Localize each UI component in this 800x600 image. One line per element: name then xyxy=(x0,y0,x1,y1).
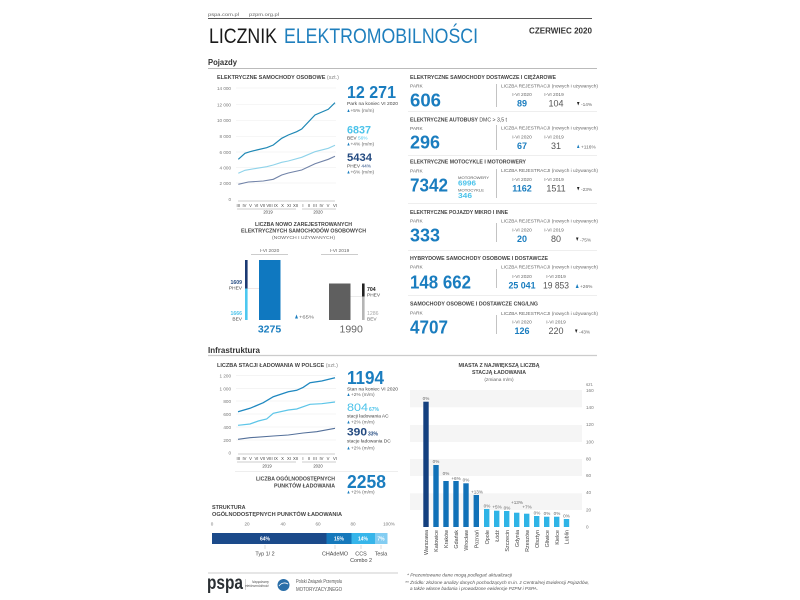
park value: 7342 xyxy=(410,176,448,196)
segment labels xyxy=(255,545,387,564)
city labels: Kraków xyxy=(444,530,450,548)
y axis: 140 xyxy=(586,405,594,410)
city labels: Rzeszów xyxy=(525,530,531,552)
registrations: LICZBA REJESTRACJI (nowych i używanych) xyxy=(501,264,598,270)
panel: CNG/LNG xyxy=(410,302,598,338)
change indicator xyxy=(295,314,315,320)
line chart xyxy=(220,374,337,468)
line chart: IX xyxy=(274,203,278,208)
line chart: VI xyxy=(255,203,258,208)
bars: I-VI 2019: 1286 xyxy=(367,311,379,317)
title xyxy=(209,24,478,48)
line chart: 12 000 xyxy=(217,102,231,108)
bars: I-VI 2020: 1609 xyxy=(230,280,242,286)
panel: CNG/LNG: PARK xyxy=(410,310,424,316)
card title: ELEKTRYCZNE AUTOBUSY DMC > 3,5 t xyxy=(410,118,507,124)
registrations: 80 xyxy=(551,234,561,244)
logo: PSPA: elektromobilność xyxy=(245,584,269,588)
line chart: IV xyxy=(243,456,247,461)
city labels: Gdańsk xyxy=(454,530,460,549)
stat: PHEV: PHEV 44% xyxy=(347,164,372,170)
bars: I-VI 2020: I-VI 2020 xyxy=(260,248,280,254)
card title: ELEKTRYCZNE POJAZDY MIKRO I INNE xyxy=(410,210,508,216)
stat: all stations: Stan na koniec VI 2020 xyxy=(347,386,398,392)
line chart: 8 000 xyxy=(220,134,231,139)
chart heading: (zmiana m/m) xyxy=(484,377,514,383)
registrations: I-VI 2020 xyxy=(512,320,532,326)
line chart: V xyxy=(327,203,330,208)
segment labels: Typ 1/ 2 xyxy=(255,552,275,558)
line chart: VI xyxy=(333,456,337,461)
panel: micro vehicles xyxy=(410,210,598,246)
line chart: 2020 xyxy=(313,464,323,468)
header links xyxy=(208,12,279,18)
panel: buses: PARK xyxy=(410,126,424,132)
line chart: XI xyxy=(287,203,291,208)
line chart: I xyxy=(302,456,304,461)
registrations: I-VI 2020 xyxy=(512,177,532,183)
bars: I-VI 2019: I-VI 2019 xyxy=(330,248,350,254)
stat: BEV: BEV 56% xyxy=(347,136,368,142)
panel: newly registered cars xyxy=(229,222,381,336)
line chart: 200 xyxy=(223,438,231,443)
stat: total park: Park na koniec VI 2020 xyxy=(347,101,398,107)
panel: micro vehicles: PARK xyxy=(410,218,424,224)
percent labels: 0% xyxy=(463,478,469,482)
heading: STRUKTURA xyxy=(212,505,246,511)
breakdown xyxy=(458,175,489,200)
percent labels: 0% xyxy=(534,510,540,516)
city labels: Olsztyn xyxy=(535,530,541,548)
line chart: XII xyxy=(293,203,298,208)
panel: public charging points xyxy=(256,472,386,496)
bars: I-VI 2019: 1990 xyxy=(340,324,363,336)
footnotes: * Prezentowane dane mogą podlegać aktualizacji xyxy=(407,572,513,578)
city labels: Łódź xyxy=(495,530,501,542)
line chart: VI xyxy=(333,203,337,208)
stacked bar: 15% xyxy=(334,536,345,542)
line chart: 0 xyxy=(228,197,231,202)
city labels: Poznań xyxy=(474,530,480,548)
line chart: IV xyxy=(320,203,324,208)
registrations: LICZBA REJESTRACJI (nowych i używanych) xyxy=(501,168,598,174)
registrations: 20 xyxy=(517,234,527,244)
line chart: 400 xyxy=(223,425,231,430)
registrations: I-VI 2019 xyxy=(546,320,566,326)
line chart: 2019 xyxy=(262,464,272,468)
line chart: 600 xyxy=(223,412,231,417)
panel heading: (NOWYCH I UŻYWANYCH) xyxy=(272,234,335,241)
line chart: V xyxy=(327,456,330,461)
stat: AC stations: stacji ładowania AC xyxy=(347,414,389,420)
city labels: Kielce xyxy=(555,530,561,545)
breakdown: MOTOCYKLE xyxy=(458,188,484,192)
registrations: I-VI 2019 xyxy=(544,134,564,140)
park value: 296 xyxy=(410,132,440,152)
registrations: 89 xyxy=(517,98,527,108)
city labels: Lublin xyxy=(564,530,570,544)
stat: PHEV: 5434 xyxy=(347,152,373,164)
stat: all stations: +2% (m/m) xyxy=(351,392,375,398)
panel: motorcycles: PARK xyxy=(410,168,424,174)
panel: public charging points: 2258 xyxy=(347,472,386,492)
stat: AC stations: 67% xyxy=(369,407,380,413)
heading: Pojazdy: Pojazdy xyxy=(208,58,238,67)
card title: ELEKTRYCZNE SAMOCHODY DOSTAWCZE I CIĘŻAROWE xyxy=(410,74,556,81)
chart title: ELEKTRYCZNE SAMOCHODY OSOBOWE (szt.) xyxy=(217,75,339,81)
logo: PZPM: MOTORYZACYJNEGO xyxy=(296,587,342,593)
percent labels: 0% xyxy=(504,506,510,510)
heading: OGÓLNODOSTĘPNYCH PUNKTÓW ŁADOWANIA xyxy=(212,510,342,518)
segment labels: CCS xyxy=(355,552,367,558)
bars xyxy=(423,402,569,527)
percent labels: +6% xyxy=(451,476,461,481)
stat: all stations: 1194 xyxy=(347,368,384,388)
park value: 333 xyxy=(410,226,440,246)
bars: I-VI 2019: BEV xyxy=(367,316,377,322)
panel: cities bar chart xyxy=(410,363,594,555)
registrations: 25 041 xyxy=(508,280,536,290)
y axis: 20 xyxy=(586,508,592,512)
line chart: 0 xyxy=(228,450,231,456)
stat: DC stations xyxy=(347,426,391,452)
line chart: 4 000 xyxy=(220,166,231,170)
breakdown: 6996 xyxy=(458,180,476,188)
panel heading xyxy=(241,222,366,241)
change indicator: +65% xyxy=(299,314,315,320)
y axis: 0 xyxy=(586,524,589,530)
segment labels: Combo 2 xyxy=(350,558,372,564)
stacked bar: 64% xyxy=(260,536,271,542)
line chart: V xyxy=(249,203,252,208)
percent labels: 0% xyxy=(563,514,570,518)
date: CZERWIEC 2020 xyxy=(529,26,593,36)
segment labels: CHAdeMO xyxy=(322,552,348,558)
percent labels: 0% xyxy=(554,511,560,516)
stacked bar axis: 40 xyxy=(280,522,286,526)
line chart: II xyxy=(308,456,310,461)
line chart xyxy=(217,86,337,214)
stat: total park: 12 271 xyxy=(347,82,396,102)
stat: DC stations: 33% xyxy=(368,432,379,438)
registrations: 1511 xyxy=(546,184,566,194)
bars: I-VI 2020: 1666 xyxy=(230,311,242,317)
chart heading xyxy=(458,363,540,383)
card title: SAMOCHODY OSOBOWE I DOSTAWCZE CNG/LNG xyxy=(410,302,538,308)
line chart: VI xyxy=(255,456,258,461)
stat: total park xyxy=(347,82,398,114)
percent labels: 0% xyxy=(443,471,449,476)
stacked bar axis: 80 xyxy=(350,522,356,526)
line chart: 2020 xyxy=(313,210,323,214)
y axis: 40 xyxy=(586,490,592,495)
city labels: Szczecin xyxy=(505,530,511,552)
breakdown: 346 xyxy=(458,193,472,200)
registrations: -75% xyxy=(580,238,592,244)
stat: total park: +5% (m/m) xyxy=(350,108,374,114)
panel heading: ELEKTRYCZNYCH SAMOCHODÓW OSOBOWYCH xyxy=(241,226,366,234)
title: LICZNIK xyxy=(209,25,277,48)
registrations: +116% xyxy=(581,144,596,150)
registrations: I-VI 2019 xyxy=(544,177,564,183)
bars: I-VI 2019: PHEV xyxy=(367,292,381,298)
registrations: -14% xyxy=(581,102,593,108)
registrations: 220 xyxy=(548,326,564,336)
line chart: I xyxy=(302,203,304,208)
panel: commercial vehicles xyxy=(410,74,598,110)
bars: I-VI 2020 xyxy=(229,248,288,336)
line chart: X xyxy=(281,203,284,208)
line chart: 1 000 xyxy=(220,386,231,392)
logo: PZPM xyxy=(278,579,342,593)
registrations xyxy=(501,168,598,194)
stat: PHEV: +6% (m/m) xyxy=(350,170,374,176)
registrations: I-VI 2019 xyxy=(544,92,564,98)
header links: pspa.com.pl xyxy=(208,12,239,18)
registrations xyxy=(501,218,598,244)
registrations: 126 xyxy=(514,326,530,336)
stat: BEV: 6837 xyxy=(347,124,371,136)
city labels: Gdynia xyxy=(515,530,521,547)
stacked bar axis: 0 xyxy=(211,522,214,526)
park value: 148 662 xyxy=(410,272,471,292)
percent labels: +13% xyxy=(511,500,523,505)
city labels: Gliwice xyxy=(545,530,551,547)
panel: charging stations line chart xyxy=(217,363,398,468)
registrations xyxy=(501,84,598,108)
registrations: LICZBA REJESTRACJI (nowych i używanych) xyxy=(501,311,598,317)
line chart: XI xyxy=(287,456,291,461)
line chart: 6 000 xyxy=(220,150,231,155)
registrations: 19 853 xyxy=(543,280,569,290)
bars: I-VI 2019 xyxy=(321,248,381,336)
stat: BEV: +4% (m/m) xyxy=(350,142,374,148)
stat: DC stations: +2% (m/m) xyxy=(351,446,375,452)
card title: HYBRYDOWE SAMOCHODY OSOBOWE I DOSTAWCZE xyxy=(410,256,548,262)
city labels xyxy=(424,530,570,555)
percent labels: 0% xyxy=(484,504,490,508)
line chart: III xyxy=(313,203,317,208)
line chart: 2019 xyxy=(263,210,273,214)
registrations xyxy=(501,126,598,151)
percent labels: 0% xyxy=(544,511,550,516)
line chart: 14 000 xyxy=(217,86,231,91)
footnotes xyxy=(405,572,589,592)
stat: AC stations: 804 xyxy=(347,402,368,414)
bars: I-VI 2020: 3275 xyxy=(258,324,281,336)
city labels: Katowice xyxy=(434,530,440,552)
percent labels: 0% xyxy=(423,396,429,401)
y axis: 160 xyxy=(586,388,594,393)
segment labels: Tesla xyxy=(375,552,387,558)
bars: I-VI 2019: 704 xyxy=(367,287,376,293)
heading xyxy=(212,505,342,518)
stacked bar axis: 100% xyxy=(383,522,395,526)
registrations: 1162 xyxy=(512,184,532,194)
line chart: 800 xyxy=(223,399,231,404)
percent labels: +7% xyxy=(522,504,532,510)
stat: DC stations: 390 xyxy=(347,426,367,438)
stat: AC stations xyxy=(347,402,389,426)
panel: hybrids: PARK xyxy=(410,264,424,270)
panel: motorcycles xyxy=(410,160,598,200)
panel: buses xyxy=(410,118,598,152)
chart heading: MIASTA Z NAJWIĘKSZĄ LICZBĄ xyxy=(458,363,540,369)
line chart: III xyxy=(237,203,240,208)
park value: 606 xyxy=(410,90,441,110)
stat: AC stations: +2% (m/m) xyxy=(351,420,375,426)
panel: public charging points: PUNKTÓW ŁADOWANIA xyxy=(274,482,335,490)
city labels: Opole xyxy=(485,530,491,544)
registrations: LICZBA REJESTRACJI (nowych i używanych) xyxy=(501,84,598,90)
line chart: III xyxy=(313,456,317,461)
registrations: I-VI 2020 xyxy=(512,134,532,140)
line chart: X xyxy=(281,456,284,461)
line chart: III xyxy=(237,456,240,461)
title: ELEKTROMOBILNOŚCI xyxy=(284,24,478,48)
line chart: IV xyxy=(243,203,247,208)
chart heading: STACJĄ ŁADOWANIA xyxy=(472,370,526,376)
footnotes: ** Źródło: złożone analizy danych pochodzących m.in. z Centralnej Ewidencji Pojazdów, xyxy=(405,579,589,586)
stacked bar: 14% xyxy=(358,536,369,542)
logo: PSPA: pspa xyxy=(207,573,243,594)
stacked bar axis xyxy=(211,522,395,526)
percent labels xyxy=(423,396,570,518)
registrations: 31 xyxy=(551,141,561,151)
line chart: VIII xyxy=(266,456,273,461)
logo: PZPM: Polski Związek Przemysłu xyxy=(296,579,342,585)
line chart: VII xyxy=(260,456,265,461)
percent labels: +13% xyxy=(471,490,483,494)
line chart: VIII xyxy=(266,203,273,208)
panel: public charging points: +2% (m/m) xyxy=(351,490,375,496)
registrations: I-VI 2020 xyxy=(512,228,532,234)
panel: electric passenger cars line chart xyxy=(217,75,398,214)
line chart: V xyxy=(249,456,252,461)
y axis xyxy=(586,382,594,530)
registrations: LICZBA REJESTRACJI (nowych i używanych) xyxy=(501,126,598,132)
y axis: 100 xyxy=(586,440,594,444)
line chart: 2 000 xyxy=(220,181,231,186)
y axis: szt. xyxy=(586,382,593,387)
registrations: LICZBA REJESTRACJI (nowych i używanych) xyxy=(501,218,598,224)
logo: PSPA: Napędzamy xyxy=(252,580,269,584)
footnotes: a także własne badania i prowadzone ewidencje PZPM i PSPA. xyxy=(410,586,538,592)
registrations: -23% xyxy=(581,187,593,193)
bars: I-VI 2020: PHEV xyxy=(229,286,243,292)
stacked bar xyxy=(212,533,388,544)
card title: ELEKTRYCZNE MOTOCYKLE I MOTOROWERY xyxy=(410,160,526,166)
registrations xyxy=(501,311,598,336)
registrations: 104 xyxy=(548,98,564,108)
park value: 4707 xyxy=(410,318,448,338)
stat: BEV xyxy=(347,124,374,148)
city labels: Warszawa xyxy=(424,530,430,555)
heading: Infrastruktura: Infrastruktura xyxy=(208,346,261,355)
y axis: 80 xyxy=(586,456,592,462)
chart title: LICZBA STACJI ŁADOWANIA W POLSCE (szt.) xyxy=(217,363,338,369)
line chart: 10 000 xyxy=(217,118,231,123)
line chart: XII xyxy=(293,456,298,461)
bars: I-VI 2020: BEV xyxy=(232,316,243,322)
line chart: IV xyxy=(320,456,324,461)
registrations: I-VI 2019 xyxy=(544,228,564,234)
y axis: 60 xyxy=(586,473,592,478)
stat: DC stations: stacje ładowania DC xyxy=(347,438,391,444)
line chart: IX xyxy=(274,456,278,461)
panel: hybrids xyxy=(410,256,598,292)
registrations: +26% xyxy=(580,284,593,290)
panel heading: LICZBA NOWO ZAREJESTROWANYCH xyxy=(255,222,352,228)
header links: pzpm.org.pl xyxy=(249,12,279,18)
city labels: Wrocław xyxy=(464,530,470,551)
stacked bar axis: 20 xyxy=(244,522,250,526)
percent labels: 0% xyxy=(433,459,439,464)
y axis: 120 xyxy=(586,422,594,427)
line chart: II xyxy=(308,203,310,208)
stacked bar: 7% xyxy=(377,536,385,542)
stat: all stations xyxy=(347,368,398,398)
panel: commercial vehicles: PARK xyxy=(410,84,424,90)
panel: public charging points: LICZBA OGÓLNODOSTĘPNYCH xyxy=(256,474,335,482)
line chart: 1 200 xyxy=(220,374,231,378)
breakdown: MOTOROWERY xyxy=(458,175,489,180)
stat: PHEV xyxy=(347,152,374,176)
panel: structure of public charging points xyxy=(211,505,395,564)
registrations xyxy=(501,264,598,290)
registrations: -43% xyxy=(579,330,591,336)
percent labels: +5% xyxy=(492,504,502,510)
line chart: VII xyxy=(260,203,265,208)
stacked bar axis: 60 xyxy=(315,522,321,526)
registrations: I-VI 2019 xyxy=(546,274,566,280)
registrations: I-VI 2020 xyxy=(512,274,532,280)
registrations: I-VI 2020 xyxy=(512,92,532,98)
registrations: 67 xyxy=(517,141,527,151)
